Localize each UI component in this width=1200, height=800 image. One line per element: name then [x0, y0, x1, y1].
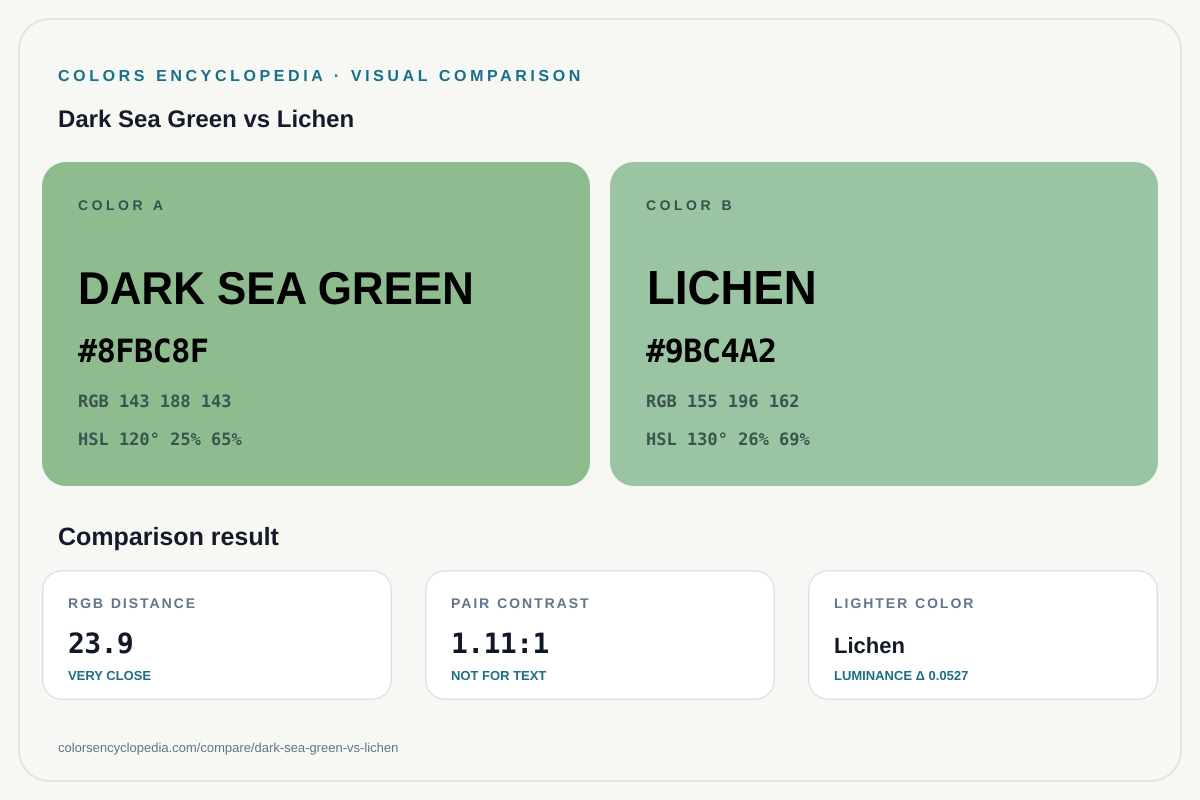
- card: pair contrast: [425, 570, 775, 700]
- color A RGB: RGB 143 188 143: [78, 392, 232, 412]
- RGB distance note: VERY CLOSE: [68, 668, 151, 683]
- color A label: COLOR A: [78, 197, 167, 213]
- lighter color label: LIGHTER COLOR: [834, 595, 975, 611]
- color B RGB: RGB 155 196 162: [646, 392, 800, 412]
- color B label: COLOR B: [646, 197, 735, 213]
- panel: color B: [610, 162, 1158, 486]
- card: RGB distance: [42, 570, 392, 700]
- panel: color A: [42, 162, 590, 486]
- color A HSL: HSL 120° 25% 65%: [78, 430, 242, 450]
- lighter color value: Lichen: [834, 633, 905, 658]
- color B name: LICHEN: [646, 262, 816, 315]
- section heading: comparison result: Comparison result: [58, 523, 279, 551]
- color B hex: #9BC4A2: [646, 332, 776, 370]
- color B HSL: HSL 130° 26% 69%: [646, 430, 810, 450]
- pair contrast value: 1.11:1: [451, 627, 549, 660]
- title: Dark Sea Green vs Lichen: [58, 106, 354, 133]
- eyebrow heading: COLORS ENCYCLOPEDIA · VISUAL COMPARISON: [58, 68, 584, 85]
- RGB distance label: RGB DISTANCE: [68, 595, 197, 611]
- card: lighter color: [808, 570, 1158, 700]
- color A name: DARK SEA GREEN: [78, 262, 474, 314]
- color A hex: #8FBC8F: [78, 332, 208, 370]
- pair contrast note: NOT FOR TEXT: [451, 668, 546, 683]
- pair contrast label: PAIR CONTRAST: [451, 595, 591, 611]
- lighter color note: LUMINANCE Δ 0.0527: [834, 668, 968, 683]
- RGB distance value: 23.9: [68, 627, 133, 660]
- footer URL: colorsencyclopedia.com/compare/dark-sea-green-vs-lichen: [58, 740, 398, 755]
